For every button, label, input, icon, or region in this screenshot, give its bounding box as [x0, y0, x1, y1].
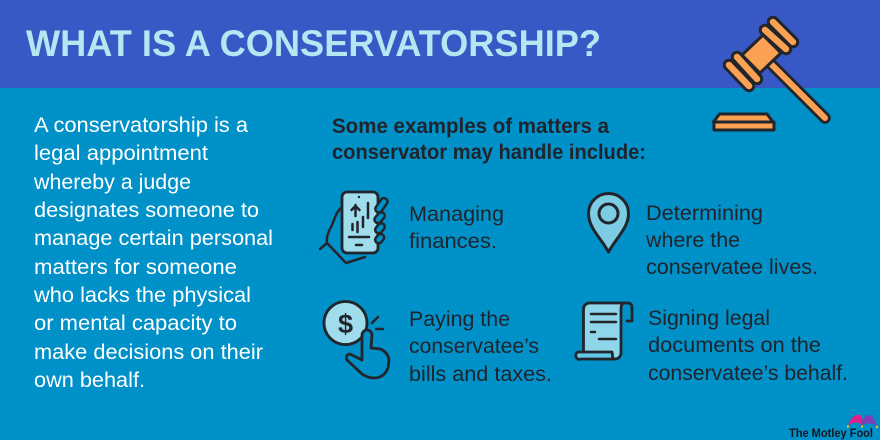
label: documents on the — [648, 333, 821, 357]
title: WHAT IS A CONSERVATORSHIP? — [26, 23, 601, 64]
description paragraph: make decisions on their — [34, 340, 263, 364]
description paragraph: or mental capacity to — [34, 311, 237, 335]
label — [648, 306, 848, 385]
item: determining residence — [588, 194, 818, 279]
examples heading — [332, 114, 646, 164]
item: signing documents — [576, 303, 848, 385]
icon: jester hat — [847, 415, 878, 428]
description paragraph: matters for someone — [34, 255, 237, 279]
label: Signing legal — [648, 306, 770, 330]
description paragraph: legal appointment — [34, 141, 208, 165]
description paragraph: designates someone to — [34, 198, 259, 222]
description paragraph — [33, 113, 273, 392]
description paragraph: who lacks the physical — [33, 283, 251, 307]
wordmark: The Motley Fool — [789, 428, 873, 440]
label: where the — [645, 228, 740, 252]
description paragraph: whereby a judge — [33, 170, 191, 194]
examples heading: conservator may handle include: — [332, 140, 646, 164]
icon: coin and pointing hand: $ — [338, 309, 353, 339]
label: Managing — [409, 202, 504, 226]
item: managing finances — [320, 192, 504, 263]
description paragraph: own behalf. — [34, 368, 145, 392]
label: conservatee lives. — [646, 255, 818, 279]
icon: map pin — [588, 194, 628, 252]
examples heading: Some examples of matters a — [332, 114, 610, 138]
label: conservatee’s — [409, 334, 539, 358]
label — [409, 202, 504, 253]
label: Determining — [646, 201, 763, 225]
description paragraph: manage certain personal — [34, 226, 273, 250]
label: bills and taxes. — [409, 362, 552, 386]
main background panel — [0, 88, 880, 440]
logo: The Motley Fool — [789, 415, 878, 440]
item: paying bills — [324, 302, 552, 386]
label — [645, 201, 818, 279]
icon: coin and pointing hand — [324, 302, 389, 378]
label: finances. — [409, 229, 497, 253]
label: Paying the — [409, 307, 510, 331]
label — [409, 307, 552, 386]
icon: phone with chart — [320, 192, 389, 263]
label: conservatee’s behalf. — [648, 361, 848, 385]
description paragraph: A conservatorship is a — [34, 113, 248, 137]
icon: gavel — [714, 22, 825, 130]
icon: scroll document — [576, 303, 632, 359]
header band — [0, 0, 880, 88]
